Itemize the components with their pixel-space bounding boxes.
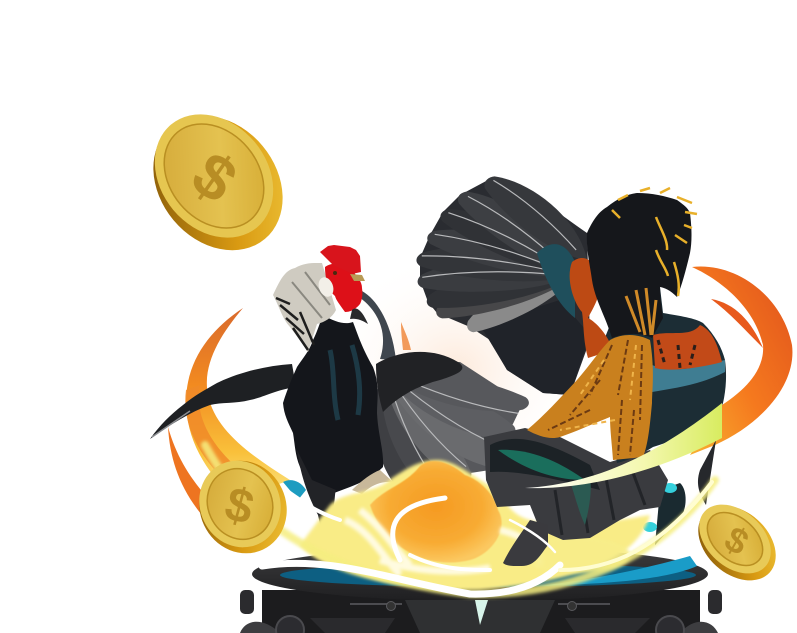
rooster: white-headed black rooster	[150, 245, 531, 542]
head and red face	[325, 263, 362, 312]
small flame lick behind roosters	[401, 322, 411, 350]
coin: large top left: $	[179, 137, 250, 217]
central fire burst	[300, 460, 650, 590]
light beam: right	[525, 403, 722, 488]
neck gold streaks	[626, 288, 656, 335]
body	[283, 315, 383, 493]
wing coverts	[376, 352, 462, 412]
coin: lower right	[684, 491, 790, 595]
wing teal patch	[537, 244, 575, 318]
foot	[503, 520, 548, 566]
pedestal	[240, 480, 722, 633]
coin: large top left	[127, 90, 309, 276]
comb	[320, 245, 361, 274]
neck hackle	[273, 263, 336, 352]
coin: lower right: $	[718, 518, 756, 563]
tail curve	[359, 291, 396, 360]
foot	[352, 470, 394, 494]
teal band	[652, 360, 725, 392]
soft background glow	[320, 250, 590, 490]
orange shoulder	[570, 258, 613, 358]
rooster: orange-black fighting rooster	[415, 163, 726, 566]
tail feathers	[484, 428, 668, 540]
coin: lower left	[184, 446, 302, 568]
spread wing underlay	[420, 180, 590, 395]
light swirl	[205, 445, 715, 594]
spread wing	[367, 359, 531, 497]
back body	[600, 287, 726, 463]
flame swirl: left	[168, 308, 290, 520]
pedestal side knobs	[240, 590, 254, 614]
spread wing feathers	[415, 163, 600, 339]
flame swirl: right	[690, 267, 792, 455]
head and neck	[587, 193, 692, 338]
left wing	[150, 364, 296, 439]
back orange	[653, 325, 722, 370]
beak	[350, 274, 365, 281]
tail tip	[698, 440, 716, 505]
golden head spikes	[612, 188, 697, 296]
lower wing shading	[480, 300, 590, 395]
coin: lower left: $	[220, 477, 259, 536]
golden hackle	[527, 335, 653, 460]
cyan base accents	[283, 480, 306, 500]
